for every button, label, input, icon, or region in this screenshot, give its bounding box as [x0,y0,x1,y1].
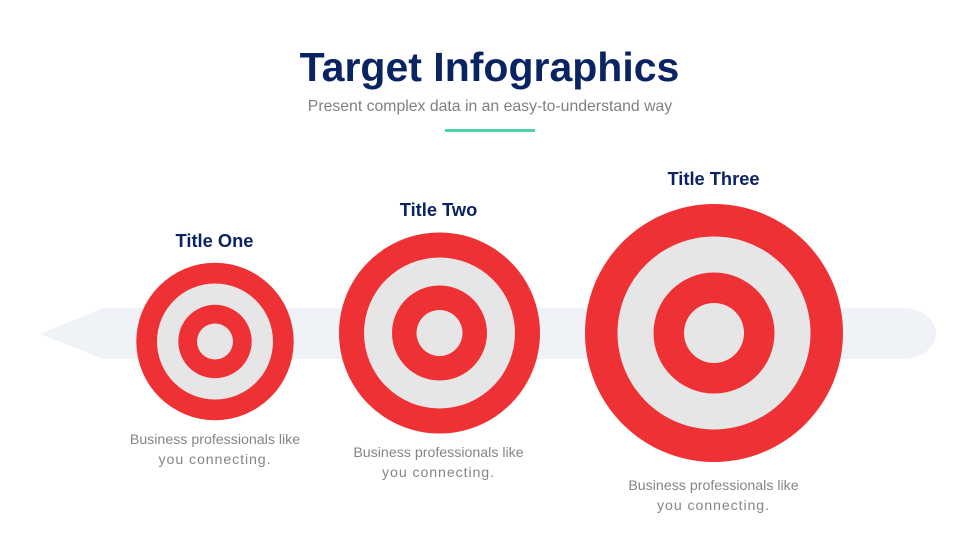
heading: title one: Title One [176,230,253,251]
text: description two: Business professionals like [353,445,524,461]
text: description two: you connecting. [382,465,495,481]
arrow band [40,308,936,359]
target one [136,263,294,420]
heading: title two: Title Two [400,199,477,220]
text: description three [628,478,799,514]
target two [339,232,540,434]
target three [585,204,843,462]
heading: title three: Title Three [667,168,760,189]
title: Target Infographics [300,44,679,90]
text: description three: Business professionals like [628,478,799,494]
text: description one [130,432,300,468]
subtitle: Present complex data in an easy-to-understand way [308,98,672,115]
text: description one: you connecting. [159,452,271,468]
title accent underline [445,129,535,132]
text: description two [353,445,524,481]
text: description three: you connecting. [657,498,770,514]
text: description one: Business professionals like [130,432,300,448]
